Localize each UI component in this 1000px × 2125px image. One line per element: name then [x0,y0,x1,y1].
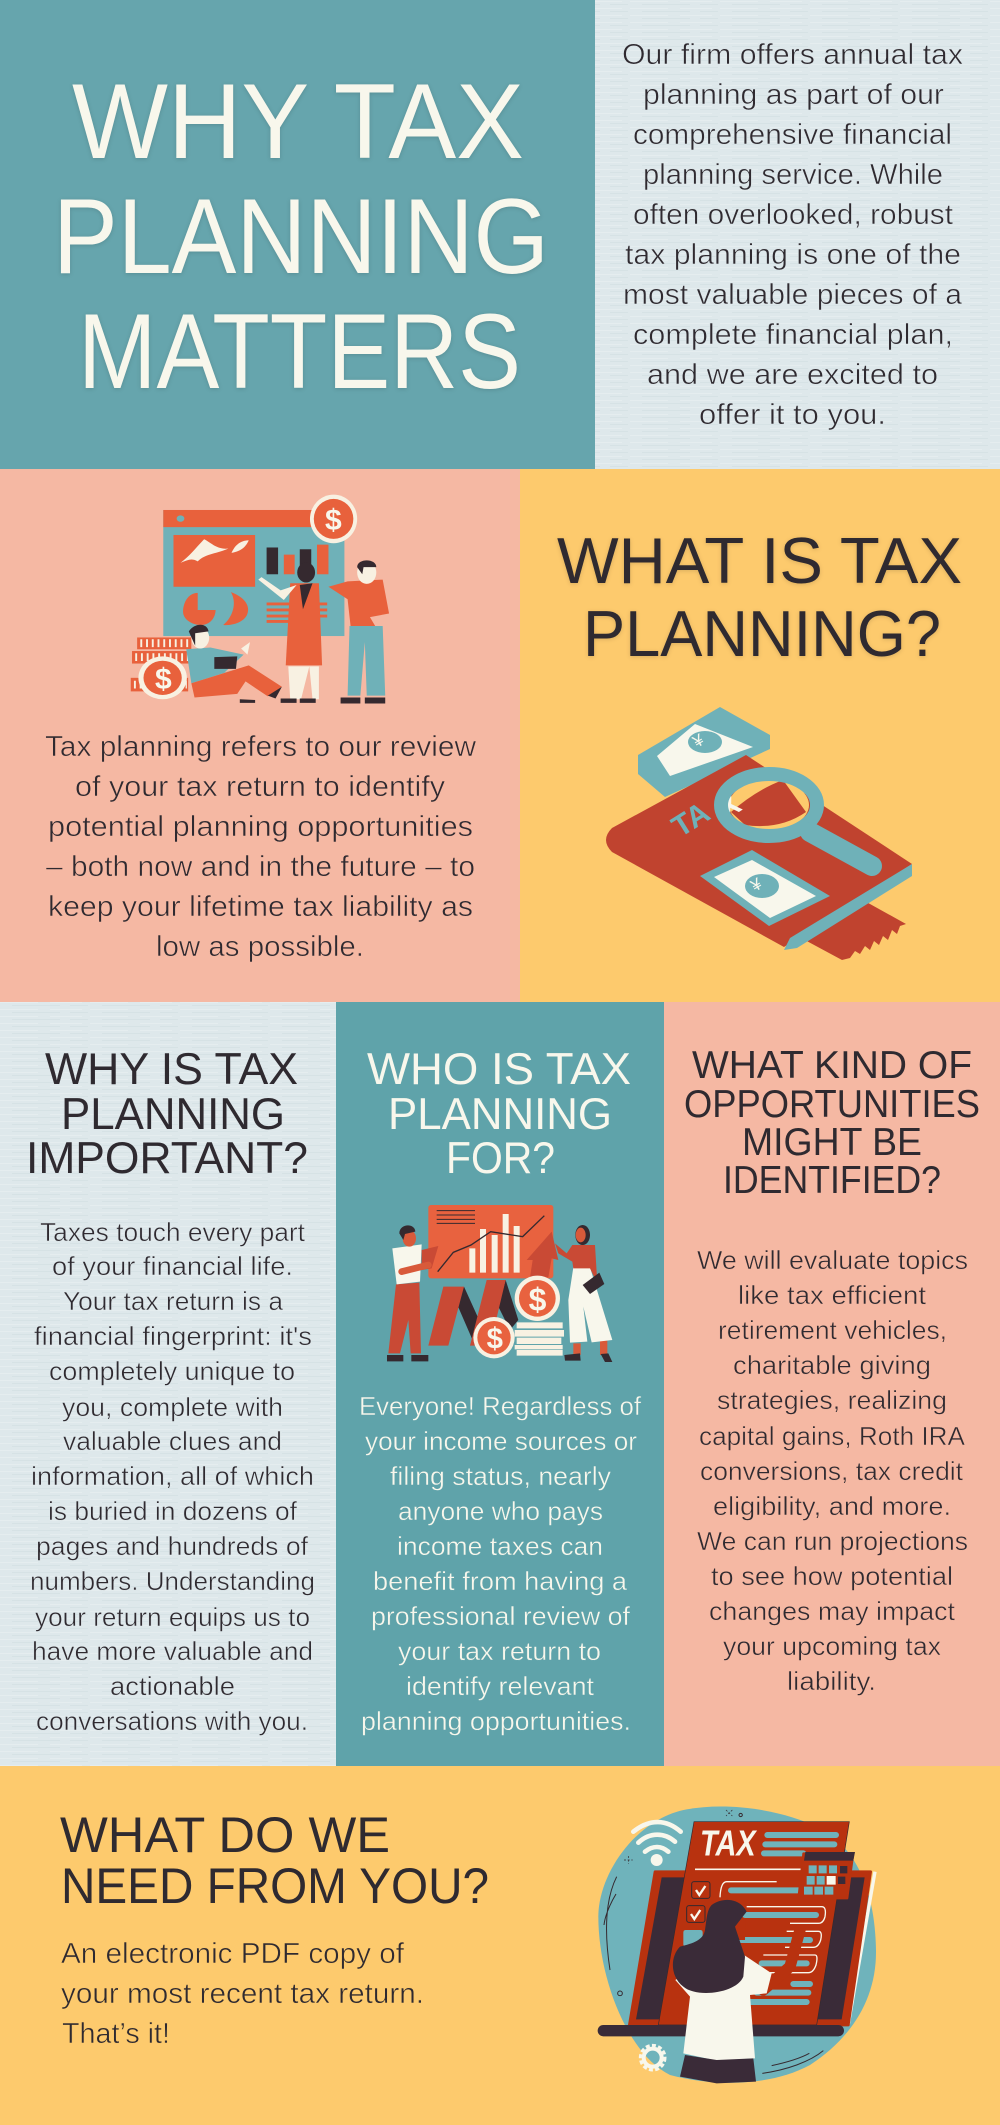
text block: who for: planning opportunities. [361,1706,631,1736]
text block: why important: actionable [110,1671,235,1701]
text block: opportunities: retirement vehicles, [718,1315,947,1345]
text block: why important: pages and hundreds of [36,1531,309,1561]
text block: opportunities: conversions, tax credit [700,1456,964,1486]
illustration: tax book, banknotes and magnifier: X [712,787,747,826]
text block: firm offer: complete financial plan, [633,319,953,351]
text block: opportunities: to see how potential [711,1561,953,1591]
heading: opportunities: OPPORTUNITIES [684,1083,980,1126]
text block: who for: your income sources or [365,1426,637,1456]
text block: why important: Your tax return is a [63,1286,284,1316]
text block: why important: financial fingerprint: it's [34,1321,312,1351]
text block: definition: low as possible. [156,931,364,963]
illustration: two advisers presenting a growth chart: $ [487,1323,503,1356]
text block: why important: is buried in dozens of [48,1496,298,1526]
text block: firm offer: comprehensive financial [633,119,952,151]
text block: definition: – both now and in the future – to [46,851,475,883]
text block: why important: information, all of which [31,1461,314,1491]
heading: opportunities [684,1044,980,1202]
text block: opportunities: eligibility, and more. [713,1491,951,1521]
text block: who for: filing status, nearly [390,1461,611,1491]
title: MATTERS [78,291,521,411]
heading: what is tax planning [557,524,962,670]
text block: firm offer: tax planning is one of the [625,239,961,271]
text block: what we need [61,1938,424,2050]
illustration: team reviewing financial dashboard: $ [155,663,172,696]
illustration: tax book, banknotes and magnifier [606,707,912,960]
panel: tax planning definition [0,469,520,1002]
text block: firm offer: often overlooked, robust [633,199,953,231]
text block: why important: completely unique to [49,1356,295,1386]
text block: firm offer: Our firm offers annual tax [622,39,964,71]
text block: who for: anyone who pays [398,1496,603,1526]
heading: opportunities: IDENTIFIED? [723,1159,941,1202]
heading: why important: IMPORTANT? [26,1134,308,1183]
text block: opportunities: your upcoming tax [723,1631,941,1661]
illustration: team reviewing financial dashboard [131,495,389,704]
text block: what we need: That’s it! [62,2018,170,2050]
illustration: tax book, banknotes and magnifier: ¥ [689,730,708,752]
text block: who for: identify relevant [406,1671,595,1701]
text block: opportunities [697,1245,968,1696]
text block: opportunities: charitable giving [733,1350,931,1380]
panel: what do we need from you [0,1766,1000,2125]
text block: why important: have more valuable and [32,1636,313,1666]
illustration: team reviewing financial dashboard: $ [325,504,342,537]
panel: who is tax planning for [336,1002,664,1766]
heading: why important: PLANNING [61,1090,285,1139]
text block: firm offer: most valuable pieces of a [623,279,963,311]
text block: opportunities: We can run projections [697,1526,968,1556]
text block: why important: valuable clues and [63,1426,282,1456]
heading: why important [26,1045,308,1183]
text block: firm offer: and we are excited to [647,359,938,391]
illustration: tax book, banknotes and magnifier: ¥ [747,874,766,896]
panel: title [0,0,595,469]
panel: what opportunities [664,1002,1000,1766]
heading: who for: WHO IS TAX [367,1045,631,1094]
text block: who for: benefit from having a [373,1566,628,1596]
heading: opportunities: WHAT KIND OF [692,1044,972,1087]
text block: definition: Tax planning refers to our review [45,731,477,763]
heading: why important: WHY IS TAX [45,1045,298,1094]
text block: definition: potential planning opportunities [48,811,473,843]
text block: definition: of your tax return to identify [75,771,446,803]
heading: opportunities: MIGHT BE [742,1121,922,1164]
text block: who for: income taxes can [397,1531,603,1561]
heading: what is tax planning: WHAT IS TAX [557,524,962,597]
text block: who for: your tax return to [398,1636,601,1666]
text block: opportunities: We will evaluate topics [697,1245,968,1275]
heading: who for: FOR? [446,1134,555,1183]
panel: introduction [595,0,1000,469]
heading: what we need: NEED FROM YOU? [61,1858,489,1914]
text block: opportunities: capital gains, Roth IRA [699,1421,966,1451]
text block: what we need: your most recent tax return. [61,1978,424,2010]
text block: why important: Taxes touch every part [40,1217,306,1247]
text block: why important: you, complete with [62,1392,283,1422]
text block: why important: of your financial life. [52,1251,293,1281]
text block: why important [30,1217,315,1736]
text block: definition: keep your lifetime tax liability as [48,891,473,923]
text block: why important: numbers. Understanding [30,1566,315,1596]
illustration: two advisers presenting a growth chart [387,1205,612,1362]
illustration: woman filling in a tax form on a laptop: TAX [700,1823,757,1864]
heading: who for: PLANNING [388,1090,612,1139]
panel: why is tax planning important [0,1002,336,1766]
title [53,61,549,411]
heading: what is tax planning: PLANNING? [583,597,941,670]
text block: opportunities: changes may impact [709,1596,956,1626]
illustration: two advisers presenting a growth chart: $ [529,1282,547,1318]
text block: firm offer [622,39,964,431]
text block: definition [45,731,477,963]
text block: firm offer: offer it to you. [699,399,886,431]
title: WHY TAX [72,61,524,181]
text block: why important: conversations with you. [36,1706,308,1736]
heading: who for [367,1045,631,1183]
text block: firm offer: planning service. While [643,159,943,191]
illustration: tax book, banknotes and magnifier: TA [666,796,716,844]
text block: who for [359,1391,642,1736]
panel: what is tax planning [520,469,1000,1002]
text block: what we need: An electronic PDF copy of [61,1938,405,1970]
text block: who for: professional review of [371,1601,631,1631]
text block: firm offer: planning as part of our [643,79,944,111]
title: PLANNING [53,176,549,296]
text block: opportunities: strategies, realizing [717,1385,947,1415]
text block: opportunities: like tax efficient [738,1280,927,1310]
text block: who for: Everyone! Regardless of [359,1391,642,1421]
text block: opportunities: liability. [787,1666,876,1696]
text block: why important: your return equips us to [35,1602,310,1632]
illustration: woman filling in a tax form on a laptop [598,1806,876,2083]
heading: what we need: WHAT DO WE [60,1807,390,1863]
heading: what we need [60,1807,489,1914]
